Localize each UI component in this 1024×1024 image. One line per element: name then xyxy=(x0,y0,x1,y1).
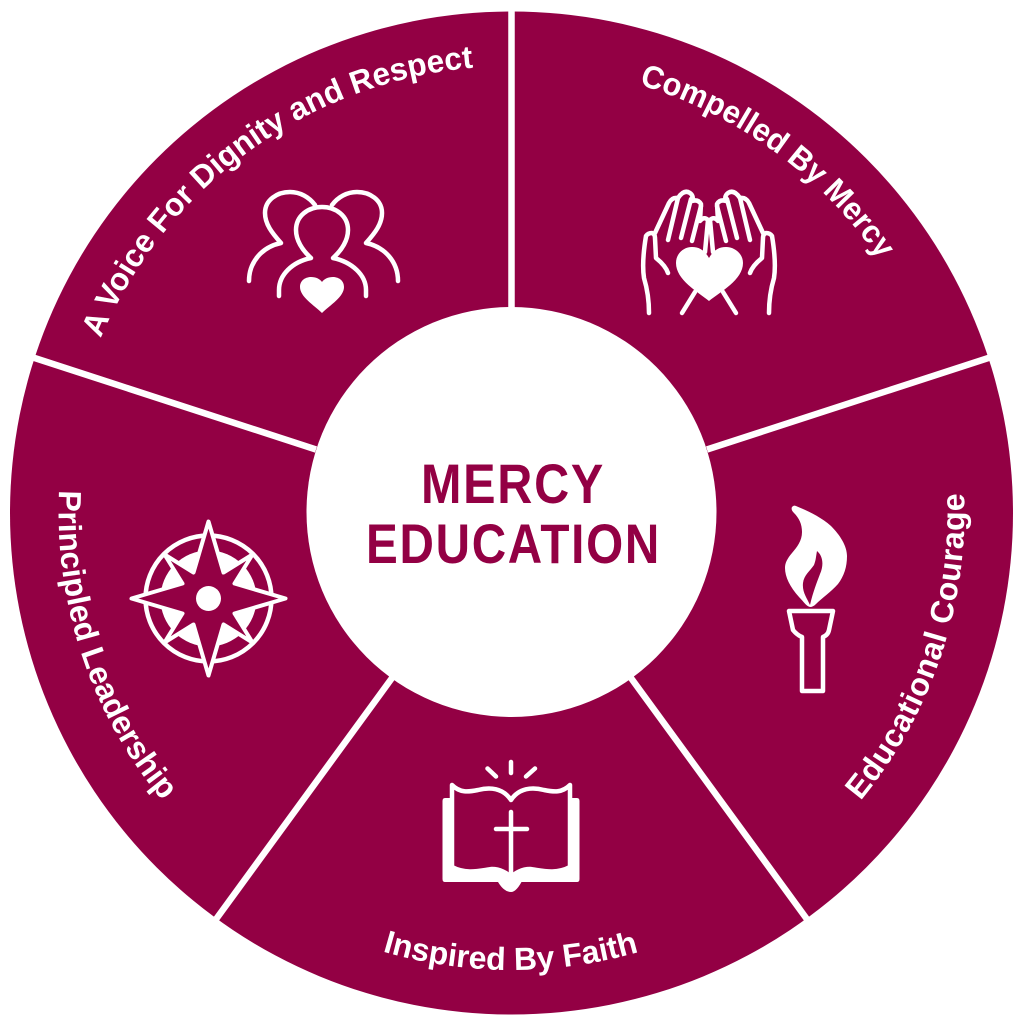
segment label: Principled Leadership: Principled Leadership xyxy=(57,492,173,798)
segment label: A Voice For Dignity and Respect: A Voice For Dignity and Respect xyxy=(84,47,474,338)
icon: open hands holding heart xyxy=(643,192,775,313)
centre circle xyxy=(306,307,716,717)
icon: torch with flame xyxy=(785,506,847,691)
segment label: Compelled By Mercy: Compelled By Mercy xyxy=(642,66,893,256)
segment label: Inspired By Faith: Inspired By Faith xyxy=(384,930,638,976)
icon: three people with heart xyxy=(249,192,398,313)
centre title xyxy=(366,452,661,575)
centre title: EDUCATION xyxy=(366,512,661,575)
icon: compass rose xyxy=(132,522,286,676)
icon: open book with cross xyxy=(442,762,580,892)
segment label: Educational Courage: Educational Courage xyxy=(844,494,972,800)
centre title: MERCY xyxy=(421,452,605,515)
